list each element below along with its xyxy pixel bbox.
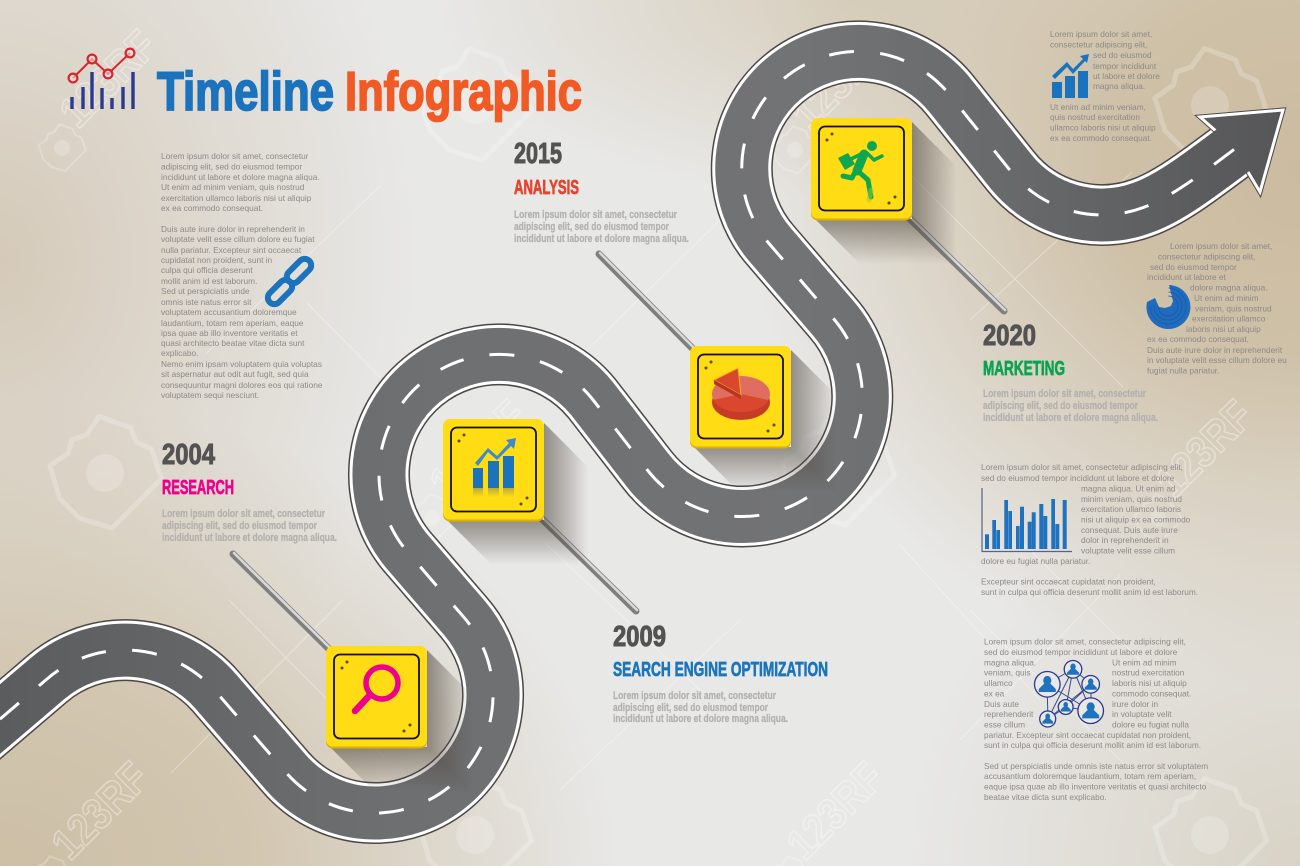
watermarks: 123RF bbox=[42, 753, 158, 866]
text block: bottom right with network icon: beatae vitae dicta sunt explicabo. bbox=[984, 792, 1107, 802]
text block: top right with growth icon: ut labore et dolore bbox=[1093, 71, 1160, 81]
text block: bottom right with network icon: accusantium doloremque laudantium, totam rem aperiam, bbox=[984, 771, 1196, 781]
text block: right with target icon: fugiat nulla pariatur. bbox=[1147, 366, 1219, 376]
milestone 2004: adipiscing elit, sed do eiusmod tempor bbox=[162, 520, 318, 532]
text block: bottom right with network icon: pariatur. Excepteur sint occaecat cupidatat non proident, bbox=[984, 730, 1191, 740]
text block: right with target icon: in voluptate velit esse cillum dolore eu bbox=[1147, 355, 1287, 365]
sign: analysis, pie chart bbox=[690, 346, 836, 492]
milestone 2015: adipiscing elit, sed do eiusmod tempor bbox=[514, 221, 670, 233]
text block: left column: voluptatem accusantium doloremque bbox=[161, 307, 297, 317]
text block: bottom right with network icon: Sed ut perspiciatis unde omnis iste natus error sit voluptatem bbox=[984, 761, 1208, 771]
text block: right with target icon: ex ea commodo consequat. bbox=[1147, 334, 1249, 344]
title bbox=[157, 60, 582, 122]
text block: right with target icon: Lorem ipsum dolor sit amet, bbox=[1170, 241, 1272, 251]
watermarks: 123RF bbox=[50, 21, 166, 137]
text block: bar chart section: Excepteur sint occaecat cupidatat non proident, bbox=[981, 576, 1156, 586]
text block: bar chart section: consequat. Duis aute irure bbox=[1081, 525, 1178, 535]
text block: left column: exercitation ullamco laboris nisi ut aliquip bbox=[161, 193, 312, 203]
text block: bottom right with network icon: reprehenderit bbox=[984, 709, 1034, 719]
text block: bottom right with network icon: eaque ipsa quae ab illo inventore veritatis et quasi architecto bbox=[984, 782, 1207, 792]
sign: seo, growth chart bbox=[443, 419, 589, 565]
text block: bottom right with network icon: ullamco bbox=[984, 678, 1013, 688]
sign: marketing, runner bbox=[811, 118, 957, 264]
milestone 2004: 2004 bbox=[162, 439, 215, 471]
text block: bar chart section: nisi ut aliquip ex ea commodo bbox=[1081, 514, 1191, 524]
text block: right with target icon bbox=[1146, 241, 1287, 376]
watermarks: 123RF bbox=[420, 391, 536, 507]
milestone 2004: Lorem ipsum dolor sit amet, consectetur bbox=[162, 508, 326, 520]
text block: top right with growth icon: ullamco laboris nisi ut aliquip bbox=[1050, 122, 1156, 132]
sign: research, magnifier bbox=[326, 646, 472, 792]
text block: bottom right with network icon: Ut enim ad minim bbox=[1112, 658, 1177, 668]
milestone 2020 bbox=[983, 320, 1158, 424]
milestone 2020: 2020 bbox=[983, 320, 1036, 352]
text block: right with target icon: sed do eiusmod tempor bbox=[1150, 262, 1237, 272]
text block: bottom right with network icon: irure dolor in bbox=[1112, 699, 1159, 709]
milestone 2004: RESEARCH bbox=[162, 477, 234, 499]
text block: bar chart section: dolore eu fugiat nulla pariatur. bbox=[981, 556, 1090, 566]
text block: top right with growth icon bbox=[1050, 29, 1160, 143]
milestone 2009 bbox=[613, 621, 828, 725]
text block: right with target icon: exercitation ullamco bbox=[1192, 314, 1266, 324]
text block: left column: voluptate velit esse cillum dolore eu fugiat bbox=[161, 234, 315, 244]
text block: top right with growth icon: Lorem ipsum dolor sit amet, bbox=[1050, 29, 1152, 39]
text block: bar chart section: Lorem ipsum dolor sit amet, consectetur adipiscing elit, bbox=[981, 462, 1183, 472]
milestone 2015: incididunt ut labore et dolore magna aliqua. bbox=[514, 233, 689, 245]
icon: running man with briefcase bbox=[838, 141, 882, 200]
text block: top right with growth icon: Ut enim ad minim veniam, bbox=[1050, 102, 1146, 112]
faint diagonal background lines bbox=[171, 172, 1180, 790]
text block: bottom right with network icon: Duis aute bbox=[984, 699, 1019, 709]
text block: bottom right with network icon: sed do eiusmod tempor incididunt ut labore et dolore bbox=[984, 647, 1178, 657]
text block: bottom right with network icon: magna aliqua. bbox=[984, 658, 1036, 668]
text block: left column: nulla pariatur. Excepteur sint occaecat bbox=[161, 245, 302, 255]
icon: growth bars bbox=[1052, 54, 1089, 98]
text block: left column: Ut enim ad minim veniam, quis nostrud bbox=[161, 182, 305, 192]
text block: left column: sit aspernatur aut odit aut fugit, sed quia bbox=[161, 369, 309, 379]
text block: left column: omnis iste natus error sit bbox=[161, 297, 252, 307]
text block: bar chart section: dolor in reprehenderit in bbox=[1081, 535, 1169, 545]
milestone 2009: 2009 bbox=[613, 621, 666, 653]
milestone 2015: 2015 bbox=[514, 138, 562, 170]
text block: right with target icon: Ut enim ad minim bbox=[1194, 293, 1259, 303]
milestone 2015: Lorem ipsum dolor sit amet, consectetur bbox=[514, 209, 678, 221]
milestone 2020: adipiscing elit, sed do eiusmod tempor bbox=[983, 400, 1139, 412]
text block: left column: adipiscing elit, sed do eiusmod tempor bbox=[161, 162, 302, 172]
text block: bottom right with network icon: ex ea bbox=[984, 688, 1005, 698]
text block: left column bbox=[161, 151, 323, 400]
text block: bottom right with network icon: nostrud exercitation bbox=[1112, 668, 1185, 678]
icon: magnifier bbox=[355, 667, 398, 711]
title: Timeline bbox=[157, 60, 334, 122]
text block: left column: explicabo. bbox=[161, 348, 198, 358]
text block: left column: Lorem ipsum dolor sit amet, consectetur bbox=[161, 151, 309, 161]
text block: right with target icon: laboris nisi ut aliquip bbox=[1186, 324, 1261, 334]
text block: left column: Duis aute irure dolor in reprehenderit in bbox=[161, 224, 305, 234]
icon: segmented donut bbox=[1146, 285, 1190, 329]
milestone 2004 bbox=[162, 439, 337, 544]
arrow head bbox=[1200, 110, 1283, 192]
text block: top right with growth icon: sed do eiusmod bbox=[1093, 50, 1152, 60]
text block: bottom right with network icon: laboris nisi ut aliquip bbox=[1112, 678, 1187, 688]
milestone 2015 bbox=[514, 138, 689, 245]
text block: bottom right with network icon: in voluptate velit bbox=[1112, 709, 1172, 719]
text block: left column: mollit anim id est laborum. bbox=[161, 276, 257, 286]
milestone 2020: Lorem ipsum dolor sit amet, consectetur bbox=[983, 388, 1147, 400]
text block: top right with growth icon: tempor incididunt bbox=[1093, 61, 1157, 71]
text block: bar chart section: minim veniam, quis nostrud bbox=[1081, 494, 1182, 504]
title: Infographic bbox=[345, 60, 582, 122]
signpost poles bbox=[233, 217, 1005, 652]
text block: bar chart section bbox=[981, 462, 1198, 597]
text block: left column: Sed ut perspiciatis unde bbox=[161, 286, 250, 296]
icon: bars and arrow bbox=[473, 438, 516, 488]
text block: top right with growth icon: ex ea commodo consequat. bbox=[1050, 133, 1152, 143]
text block: bar chart section: voluptate velit esse cillum bbox=[1081, 546, 1175, 556]
text block: bar chart section: magna aliqua. Ut enim ad bbox=[1081, 484, 1176, 494]
icon: people network bbox=[1034, 660, 1103, 727]
text block: left column: cupidatat non proident, sunt in bbox=[161, 255, 273, 265]
milestone 2004: incididunt ut labore et dolore magna aliqua. bbox=[162, 532, 337, 544]
text block: right with target icon: Duis aute irure dolor in reprehenderit bbox=[1147, 345, 1283, 355]
bar chart bbox=[982, 488, 1072, 552]
text block: left column: ipsa quae ab illo inventore veritatis et bbox=[161, 328, 298, 338]
text block: top right with growth icon: consectetur adipiscing elit, bbox=[1050, 40, 1147, 50]
text block: bottom right with network icon: commodo consequat. bbox=[1112, 688, 1191, 698]
milestone 2009: incididunt ut labore et dolore magna aliqua. bbox=[613, 713, 788, 725]
text block: bottom right with network icon: veniam, quis bbox=[984, 668, 1031, 678]
text block: top right with growth icon: quis nostrud exercitation bbox=[1050, 112, 1140, 122]
text block: bottom right with network icon bbox=[984, 637, 1208, 802]
milestone 2009: Lorem ipsum dolor sit amet, consectetur bbox=[613, 690, 777, 702]
title icon: chart with line bbox=[69, 49, 134, 109]
text block: left column: laudantium, totam rem aperiam, eaque bbox=[161, 318, 304, 328]
text block: left column: quasi architecto beatae vitae dicta sunt bbox=[161, 338, 305, 348]
text block: left column: incididunt ut labore et dolore magna aliqua. bbox=[161, 172, 320, 182]
text block: right with target icon: incididunt ut labore et bbox=[1147, 272, 1227, 282]
watermarks: 123RF bbox=[1146, 391, 1262, 507]
text block: bar chart section: sed do eiusmod tempor incididunt ut labore et dolore bbox=[981, 473, 1175, 483]
watermarks: 123RF bbox=[782, 23, 898, 139]
milestone 2009: SEARCH ENGINE OPTIMIZATION bbox=[613, 659, 828, 681]
text block: left column: Nemo enim ipsam voluptatem quia voluptas bbox=[161, 359, 322, 369]
text block: top right with growth icon: magna aliqua. bbox=[1093, 81, 1145, 91]
milestone 2020: MARKETING bbox=[983, 358, 1065, 380]
text block: left column: ex ea commodo consequat. bbox=[161, 203, 263, 213]
text block: bottom right with network icon: esse cillum bbox=[984, 720, 1025, 730]
text block: left column: consequuntur magni dolores eos qui ratione bbox=[161, 380, 323, 390]
text block: bottom right with network icon: sunt in culpa qui officia deserunt mollit anim id est laborum. bbox=[984, 740, 1201, 750]
text block: bottom right with network icon: dolore eu fugiat nulla bbox=[1112, 720, 1189, 730]
icon: 3d pie bbox=[712, 368, 770, 420]
text block: left column: voluptatem sequi nesciunt. bbox=[161, 390, 259, 400]
watermarks: 123RF bbox=[777, 753, 893, 866]
icon: chain link bbox=[265, 256, 314, 307]
milestone 2009: adipiscing elit, sed do eiusmod tempor bbox=[613, 702, 769, 714]
text block: bar chart section: exercitation ullamco laboris bbox=[1081, 504, 1181, 514]
text block: bar chart section: sunt in culpa qui officia deserunt mollit anim id est laborum. bbox=[981, 587, 1198, 597]
milestone 2015: ANALYSIS bbox=[514, 177, 579, 199]
text block: right with target icon: dolore magna aliqua. bbox=[1190, 282, 1268, 292]
text block: left column: culpa qui officia deserunt bbox=[161, 265, 253, 275]
text block: right with target icon: consectetur adipiscing elit, bbox=[1158, 252, 1255, 262]
text block: right with target icon: veniam, quis nostrud bbox=[1195, 304, 1272, 314]
milestone 2020: incididunt ut labore et dolore magna aliqua. bbox=[983, 412, 1158, 424]
text block: bottom right with network icon: Lorem ipsum dolor sit amet, consectetur adipiscing elit, bbox=[984, 637, 1186, 647]
